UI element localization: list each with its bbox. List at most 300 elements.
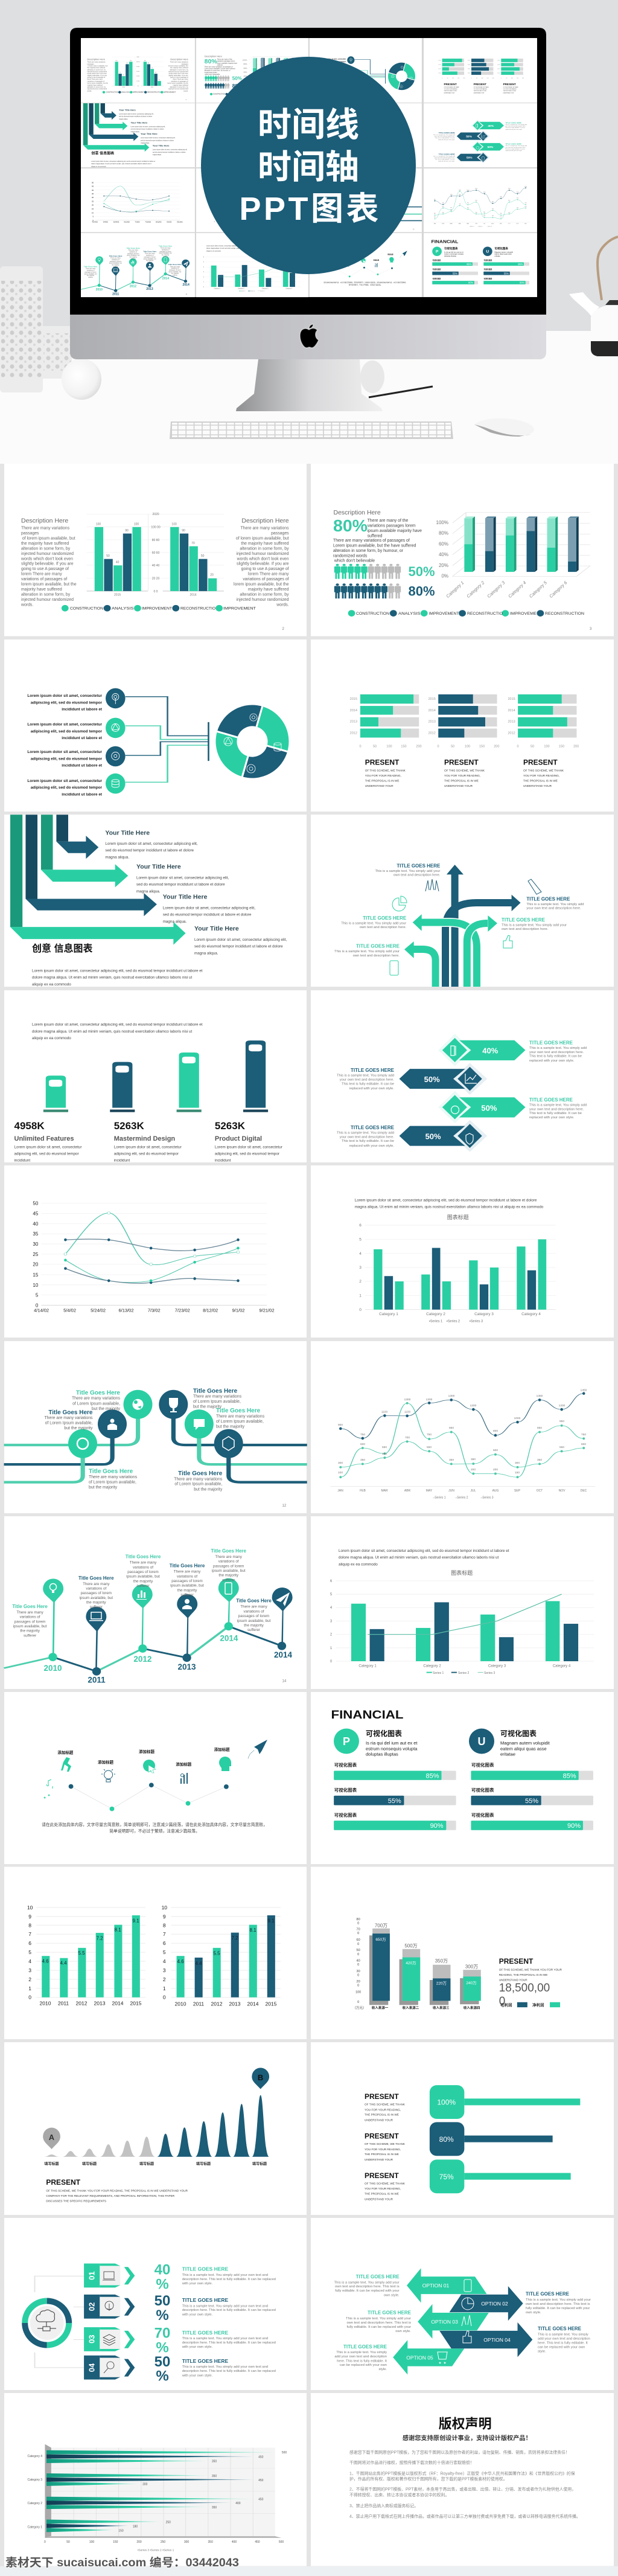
axis labels: 100 bbox=[544, 745, 550, 748]
legend: –Series 3 bbox=[480, 1496, 494, 1500]
milestone text: the majority bbox=[86, 1600, 106, 1605]
card titles: TITLE GOES HERE bbox=[182, 2297, 229, 2303]
hex icons bbox=[451, 1046, 477, 1144]
milestone text: sufferer bbox=[180, 1593, 194, 1597]
callout text: style. bbox=[378, 2368, 387, 2371]
value and axis labels: 0 0 bbox=[154, 590, 158, 594]
column text: Magnam autem volupidit bbox=[500, 1740, 550, 1746]
y axis labels: 25 bbox=[33, 1252, 39, 1257]
y axis labels: 60% bbox=[439, 541, 448, 547]
connector lines bbox=[34, 2276, 84, 2368]
icon circles bbox=[106, 688, 126, 793]
arrow titles: Your Title Here bbox=[136, 863, 181, 871]
slide background bbox=[311, 815, 614, 987]
grid bbox=[365, 1225, 556, 1310]
callout text: replaced with your own style. bbox=[349, 1087, 394, 1091]
line chart bbox=[64, 1211, 240, 1284]
axis labels: 2014 bbox=[350, 709, 357, 713]
milestone text: ipsum available, but bbox=[212, 1569, 246, 1573]
value labels: 9.1 bbox=[267, 1918, 275, 1924]
value and axis labels: 40 bbox=[116, 561, 119, 565]
y axis labels: 30 bbox=[33, 1242, 39, 1247]
callout text: This is a sample text. You simply add bbox=[529, 1046, 587, 1050]
axis labels: 2013 bbox=[350, 720, 357, 724]
slide background bbox=[311, 1341, 614, 1513]
card titles: TITLE GOES HERE bbox=[182, 2330, 229, 2336]
text block right: words. bbox=[276, 603, 289, 607]
station circles bbox=[68, 1390, 243, 1458]
x axis labels: 6/13/02 bbox=[118, 1308, 134, 1313]
milestone text: variations of bbox=[177, 1574, 197, 1578]
total figure: 18,500,00 bbox=[499, 1982, 550, 1994]
pen bbox=[369, 386, 433, 397]
milestone text: variations of bbox=[86, 1587, 107, 1591]
milestone text: ipsum available, but bbox=[79, 1596, 113, 1600]
milestone text: passages of lorem bbox=[238, 1614, 269, 1618]
card text: This is a sample text. You simply add your own text and bbox=[182, 2304, 268, 2308]
axis labels: 0 bbox=[437, 745, 439, 748]
value labels: 350万 bbox=[435, 1958, 448, 1964]
axis labels: 100 bbox=[465, 745, 470, 748]
text block left: of lorem ipsum available, but bbox=[21, 536, 75, 540]
slide background bbox=[4, 1516, 307, 1689]
value labels: 5.5 bbox=[78, 1950, 85, 1956]
value labels: 4.6 bbox=[177, 1959, 184, 1964]
arrow text: Lorem ipsum dolor sit amet, consectetur adipiscing elit, bbox=[136, 876, 229, 880]
axis labels bbox=[27, 1905, 277, 2007]
slide 2: percentage stats and 3D column chart bbox=[311, 464, 614, 636]
callout text: This is a sample text. You simply add your bbox=[341, 921, 406, 925]
slide background bbox=[311, 1692, 614, 1864]
callout text: can be replaced with your own bbox=[340, 2363, 387, 2367]
value labels: 4.4 bbox=[195, 1961, 202, 1966]
value and axis labels: 60 60 bbox=[152, 551, 159, 555]
text block: There are many of the bbox=[368, 519, 409, 523]
y axis labels: 0 bbox=[357, 1932, 359, 1935]
bent arrows bbox=[10, 815, 186, 945]
big percentages: 50 bbox=[154, 2354, 170, 2370]
spike labels bbox=[44, 2162, 267, 2167]
stat text bbox=[14, 1145, 282, 1163]
axis labels: 6 bbox=[359, 1223, 362, 1228]
category labels bbox=[445, 580, 569, 599]
progress bars bbox=[334, 1770, 593, 1830]
present text: THE PROPOSAL IS IN WE bbox=[365, 2153, 399, 2156]
text block right: variations of passages of bbox=[243, 577, 289, 582]
slide 13: pin timeline bbox=[4, 1516, 307, 1689]
axis labels: Category 3 bbox=[474, 1312, 494, 1316]
axis labels: 2015 bbox=[266, 2001, 277, 2007]
station text: There are many variations bbox=[89, 1475, 138, 1479]
y axis labels: 80 bbox=[357, 1918, 360, 1921]
bar charts bbox=[360, 694, 576, 737]
axis labels: 0 bbox=[517, 745, 519, 748]
text blocks: Lorem ipsum dolor sit amet, consectetur bbox=[27, 723, 102, 727]
screen thumbnail 4 bbox=[424, 38, 537, 103]
value labels: 250 bbox=[166, 2520, 171, 2524]
present text: THE PROPOSAL IS IN WE bbox=[365, 779, 400, 782]
milestone text: ipsum available, but bbox=[126, 1575, 160, 1579]
vase: tall perforated bbox=[0, 266, 43, 392]
spike labels: 填写标题 bbox=[252, 2162, 267, 2167]
month labels: JAN bbox=[337, 1489, 343, 1493]
value labels bbox=[42, 1918, 275, 1966]
x axis labels: 300 bbox=[184, 2540, 189, 2544]
callout titles: TITLE GOES HERE bbox=[356, 944, 400, 949]
text block right: alteration in some form, by bbox=[240, 593, 289, 597]
percent labels: 50% bbox=[424, 1075, 440, 1084]
description: 请在此处添加具体内容，文字尽量言简意赅，简单说明即可，注意减少篇段落，请在此处添加具体内容，文字尽量言简意赅， bbox=[42, 1822, 267, 1827]
screen thumbnail 13 bbox=[81, 233, 195, 297]
milestone text: passages of lorem bbox=[81, 1591, 112, 1595]
arrow text: sed do eiusmod tempor incididunt ut labore et dolore bbox=[105, 848, 194, 853]
milestone text: There are many bbox=[16, 1610, 44, 1615]
present text: READING, THE PROPOSAL IS IN WE bbox=[499, 1973, 547, 1976]
value and axis labels: 90 bbox=[125, 529, 129, 533]
slide background bbox=[311, 639, 614, 812]
stat numbers: 5263K bbox=[215, 1120, 246, 1132]
axis labels: Category 4 bbox=[521, 1312, 541, 1316]
callout text: here. This text is fully editable. It bbox=[337, 2359, 387, 2363]
callout text: This is a sample text. You simply add bbox=[526, 903, 584, 906]
callout text: add your own text and description bbox=[334, 2355, 387, 2359]
present headings: PRESENT bbox=[365, 2132, 399, 2140]
present text: OF THIS SCHEME, WE THANK bbox=[365, 2103, 406, 2106]
present text: OF THIS SCHEME, WE THANK bbox=[523, 769, 564, 772]
axis labels: 10 bbox=[27, 1905, 33, 1911]
pin icons bbox=[49, 1583, 290, 1621]
card text: This is a sample text. You simply add your own text and bbox=[182, 2273, 268, 2277]
icon: thumb bbox=[503, 935, 512, 948]
category labels: Category 2 bbox=[28, 2502, 42, 2505]
milestone text: passages of lorem bbox=[14, 1620, 45, 1624]
value labels: 1100 bbox=[404, 1411, 410, 1414]
arrow text: Lorem ipsum dolor sit amet, consectetur adipiscing elit, bbox=[163, 906, 255, 910]
stat text: Lorem ipsum dolor sit amet, consectetur bbox=[14, 1145, 82, 1150]
text block right: going to use A passage of bbox=[241, 567, 289, 571]
slide 24: copyright notice bbox=[311, 2393, 614, 2566]
slide 3: connector diagram with segmented ring bbox=[4, 639, 307, 812]
year labels bbox=[43, 1633, 293, 1685]
year labels: 2013 bbox=[177, 1662, 196, 1671]
text block left: variations of passages of bbox=[21, 577, 67, 582]
category labels: Category 3 bbox=[486, 580, 506, 599]
axis labels: 200 bbox=[494, 745, 499, 748]
card numbers: 01 bbox=[87, 2271, 96, 2280]
axis labels: 200 bbox=[416, 745, 422, 748]
icon: tag bbox=[528, 879, 541, 894]
connector lines bbox=[126, 697, 209, 782]
legend: –Series 2 bbox=[455, 1496, 468, 1500]
arrow text: Lorem ipsum dolor sit amet, consectetur adipiscing elit, bbox=[105, 842, 198, 846]
text block left: alteration in some form, by bbox=[21, 593, 71, 597]
milestone titles: Title Goes Here bbox=[170, 1563, 205, 1569]
category labels bbox=[372, 2005, 480, 2010]
screen thumbnail 12 bbox=[424, 168, 537, 232]
stat text: incididunt bbox=[14, 1159, 30, 1163]
present headings: PRESENT bbox=[523, 758, 558, 767]
option labels: OPTION 01 bbox=[422, 2283, 449, 2289]
chart title: 图表标题 bbox=[451, 1569, 473, 1576]
callout text bbox=[337, 1046, 587, 1148]
text blocks: Lorem ipsum dolor sit amet, consectetur bbox=[27, 750, 102, 754]
present text: OF THIS SCHEME, WE THANK bbox=[365, 2142, 406, 2145]
axis labels bbox=[350, 697, 579, 748]
axis labels: Category 2 bbox=[423, 1664, 441, 1668]
progress bar labels: 可视化图表 bbox=[334, 1812, 357, 1818]
text block left: slightly believable. If you are bbox=[21, 562, 74, 566]
text block left: alteration in some form, by bbox=[21, 546, 71, 551]
slide 14: combo bar and line chart bbox=[311, 1516, 614, 1689]
month labels: JUL bbox=[471, 1489, 476, 1493]
legend markers bbox=[62, 605, 223, 612]
page number: 14 bbox=[282, 1680, 287, 1684]
watermark: 素材天下 sucaisucai.com 编号：03442043 bbox=[5, 2555, 239, 2569]
stat names: Unlimited Features bbox=[14, 1135, 74, 1142]
value labels: 550 bbox=[382, 1446, 387, 1449]
month labels: JUN bbox=[448, 1489, 454, 1493]
legend labels: CONSTRUCTION bbox=[356, 612, 389, 616]
x axis labels: 150 bbox=[113, 2540, 118, 2544]
value labels: 300 bbox=[515, 1461, 520, 1465]
axis labels: 2011 bbox=[193, 2001, 204, 2007]
slide background bbox=[4, 2393, 307, 2566]
pillar chart bbox=[43, 1040, 268, 1112]
slide 23: 3D spike bar chart bbox=[4, 2393, 307, 2566]
present text: YOU FOR YOUR READING, bbox=[365, 2187, 401, 2190]
slide 19: growth spikes from A to B bbox=[4, 2042, 307, 2215]
milestone text: sufferer bbox=[90, 1605, 103, 1609]
axis labels: 2012 bbox=[350, 731, 357, 735]
value labels: 900 bbox=[338, 1423, 343, 1427]
column charts bbox=[42, 1915, 275, 1998]
card numbers bbox=[87, 2271, 97, 2372]
slide background bbox=[311, 2393, 614, 2566]
3D chart floor and grid bbox=[453, 513, 590, 576]
slide background bbox=[311, 1867, 614, 2039]
text block left: majority have suffered bbox=[21, 588, 62, 592]
arrow text: magna aliqua. bbox=[163, 920, 187, 924]
present text: YOU FOR YOUR READING, bbox=[365, 2108, 401, 2111]
x axis labels: 7/3/02 bbox=[148, 1308, 161, 1313]
axis labels: 150 bbox=[559, 745, 564, 748]
value and axis labels: 80 80 bbox=[152, 539, 159, 542]
legend labels: RECONSTRUCTIO bbox=[467, 612, 503, 616]
screen thumbnail 9 bbox=[81, 168, 195, 232]
3D column chart bbox=[464, 516, 579, 572]
pictogram: 50% and 80% people bbox=[334, 564, 401, 598]
x axis labels bbox=[44, 2540, 284, 2544]
callout titles bbox=[351, 1040, 573, 1130]
year labels: 2014 bbox=[220, 1633, 238, 1642]
axis labels: 2010 bbox=[40, 2000, 51, 2006]
value labels: 950 bbox=[559, 1420, 564, 1423]
station text: but the majority bbox=[194, 1488, 223, 1491]
text block right: the majority have suffered bbox=[241, 542, 289, 546]
callout text: This is a sample text. You simply add your bbox=[502, 923, 567, 927]
screen background bbox=[81, 38, 537, 297]
y axis labels bbox=[352, 1918, 366, 2010]
slide 12: monthly three-series line chart bbox=[311, 1341, 614, 1513]
callout titles: TITLE GOES HERE bbox=[351, 1068, 395, 1073]
text block left: lorem ipsum available, but the bbox=[21, 583, 77, 587]
value and axis labels: 50 bbox=[201, 554, 205, 558]
present headings: PRESENT bbox=[365, 758, 400, 767]
slide background bbox=[311, 1516, 614, 1689]
slide background bbox=[4, 1692, 307, 1864]
slide 21: hub with four numbered cards bbox=[4, 2218, 307, 2390]
month labels: ABR bbox=[404, 1489, 411, 1493]
axis labels: 0 bbox=[359, 1308, 362, 1312]
slide 15: step path with icons bbox=[4, 1692, 307, 1864]
arrow text: sed do eiusmod tempor incididunt ut labore et dolore bbox=[194, 944, 283, 949]
x axis labels: 450 bbox=[255, 2540, 260, 2544]
category labels: Category 5 bbox=[528, 580, 549, 599]
stat text: Lorem ipsum dolor sit amet, consectetur bbox=[114, 1145, 182, 1150]
big percentages bbox=[154, 2262, 170, 2384]
month labels: NOV bbox=[559, 1489, 565, 1493]
text block: which don't believable bbox=[333, 559, 375, 563]
text block: alteration in some form, by humour, or bbox=[333, 549, 404, 553]
value labels: 360 bbox=[471, 1458, 476, 1461]
axis labels: Category 1 bbox=[379, 1312, 398, 1316]
legend labels: RECONSTRUCTIO bbox=[180, 607, 215, 611]
category labels bbox=[28, 2455, 42, 2529]
option labels: OPTION 05 bbox=[406, 2354, 433, 2360]
ring icons bbox=[224, 714, 281, 773]
body text: 千图网将对作品进行维权，按照传播下载次数的十倍进行索取赔偿！ bbox=[349, 2460, 474, 2465]
line chart bbox=[330, 1392, 595, 1487]
heading left: Description Here bbox=[21, 517, 68, 525]
callout text: replaced with your own style. bbox=[529, 1059, 575, 1063]
percent labels: 80% bbox=[439, 2135, 454, 2144]
value labels bbox=[375, 1923, 478, 1986]
screen thumbnail 16 bbox=[424, 233, 537, 297]
stat text: Lorem ipsum dolor sit amet, consectetur bbox=[215, 1145, 282, 1150]
value labels: 750 bbox=[581, 1433, 586, 1437]
callout text: your own text and description here. bbox=[340, 1078, 394, 1081]
callout titles: TITLE GOES HERE bbox=[351, 1125, 395, 1130]
axis labels: Category 1 bbox=[358, 1664, 377, 1668]
text blocks: incididunt ut labore et bbox=[62, 792, 103, 796]
value labels: 500 bbox=[493, 1449, 498, 1452]
pin letters bbox=[49, 2073, 263, 2142]
mouse bbox=[474, 418, 534, 437]
axis labels: 2 bbox=[28, 1976, 31, 1982]
legend labels: CONSTRUCTION bbox=[70, 607, 103, 611]
station text: of Lorem Ipsum available, bbox=[45, 1421, 93, 1426]
title bbox=[239, 106, 379, 227]
arrow text: Lorem ipsum dolor sit amet, consectetur adipiscing elit, bbox=[194, 938, 287, 942]
hub ring bbox=[25, 2301, 69, 2345]
card titles bbox=[182, 2266, 229, 2364]
present text: YOU FOR YOUR READING, bbox=[523, 774, 559, 777]
category labels: Category 3 bbox=[28, 2478, 42, 2482]
axis labels: 2014 bbox=[112, 2000, 124, 2006]
milestone titles: Title Goes Here bbox=[126, 1554, 161, 1560]
stat text: incididunt bbox=[215, 1159, 231, 1163]
slide 5: nested bent arrows bbox=[4, 815, 307, 987]
body text: 2、不得将千图网的PPT模板、PPT素材，本身用于再出售，或者出租、出借、转让、分销、发布或者作为礼物供他人使用， bbox=[349, 2487, 576, 2492]
axis labels: 2012 bbox=[76, 2000, 88, 2006]
value labels: 350 bbox=[537, 1458, 542, 1462]
card titles: TITLE GOES HERE bbox=[182, 2266, 229, 2272]
spike labels: 填写标题 bbox=[44, 2162, 59, 2167]
wall bbox=[0, 0, 618, 331]
paper ball bbox=[360, 360, 384, 393]
milestone text: variations of bbox=[218, 1560, 239, 1564]
big percentages: % bbox=[156, 2368, 169, 2384]
axis labels: 5 bbox=[330, 1593, 333, 1597]
pin letters: B bbox=[258, 2073, 263, 2082]
percent labels: 75% bbox=[439, 2173, 454, 2181]
callout text: own text and description here. bbox=[353, 954, 400, 958]
percent labels: 50% bbox=[425, 1132, 441, 1141]
y axis labels: 35 bbox=[33, 1231, 39, 1237]
axis labels: 7 bbox=[163, 1931, 166, 1937]
legend bbox=[433, 1496, 494, 1500]
vase: short perforated bbox=[43, 326, 72, 379]
bar chart 2015 and 2014 bbox=[87, 527, 224, 591]
intro text: Lorem ipsum dolor sit amet, consectetur adipiscing elit, sed do eiusmod tempor incididunt ut labore et bbox=[339, 1549, 509, 1553]
callout titles: TITLE GOES HERE bbox=[538, 2326, 582, 2331]
stat labels: 50% bbox=[408, 564, 435, 579]
slide background bbox=[4, 464, 307, 636]
axis labels: 3 bbox=[163, 1967, 166, 1973]
column text: Is ria qui del ium aut ex et bbox=[366, 1740, 418, 1746]
station titles: Title Goes Here bbox=[193, 1388, 238, 1394]
value and axis labels: 70 bbox=[191, 542, 195, 545]
callout text: fully editable. It can be replaced with your bbox=[347, 2325, 411, 2329]
column text: eatem aliqui quas asse bbox=[500, 1746, 547, 1751]
callout text: fully editable. It can be replaced with your bbox=[335, 2289, 400, 2293]
axis labels bbox=[330, 1580, 571, 1668]
text block: variations passages lorem bbox=[368, 524, 416, 528]
value labels: 150 bbox=[515, 1471, 520, 1475]
intro text: dolore magna aliqua. Ut enim ad minim veniam, quis nostrud exercitation ullamco laboris nisi ut bbox=[32, 1030, 193, 1034]
screen thumbnail 10 bbox=[196, 168, 308, 232]
milestone text bbox=[13, 1555, 271, 1638]
value labels: 750 bbox=[427, 1433, 432, 1437]
present text: YOU FOR YOUR READING, bbox=[365, 2148, 401, 2151]
present text bbox=[365, 769, 564, 787]
milestone text: There are many bbox=[240, 1605, 268, 1609]
value labels: 350 bbox=[212, 2506, 217, 2510]
intro text: magna aliqua. Ut enim ad minim veniam, quis nostrud exercitation ullamco laboris nisi ut aliquip ex ea commodo bbox=[355, 1205, 544, 1209]
y axis labels: 5 bbox=[36, 1293, 39, 1298]
axis labels: 2015 bbox=[428, 697, 436, 701]
slide background bbox=[4, 1867, 307, 2039]
y axis labels bbox=[33, 1201, 39, 1308]
callout text: This is a sample text. You simply add bbox=[529, 1104, 587, 1107]
bottom strip bbox=[0, 2566, 618, 2576]
text block left: going to use A passage of bbox=[21, 567, 69, 571]
axis labels: 2013 bbox=[508, 720, 515, 724]
value and axis labels: 20 20 bbox=[152, 577, 159, 581]
present headings: PRESENT bbox=[365, 2092, 399, 2101]
icon: paper plane bbox=[248, 1740, 267, 1759]
y axis labels: 0 bbox=[357, 1921, 359, 1925]
body text: 1、千图网站出售的PPT模板是以版权形式（RF：Royalty-free）正版受《中华人民共和国著作法》和《世界版权公约》的保 bbox=[349, 2471, 575, 2476]
milestone text: variations of bbox=[20, 1615, 40, 1620]
slide 4: three horizontal bar charts bbox=[311, 639, 614, 812]
station titles: Title Goes Here bbox=[48, 1409, 93, 1416]
value labels: 240万 bbox=[466, 1981, 477, 1985]
card numbers: 02 bbox=[87, 2302, 97, 2311]
value labels: 600 bbox=[581, 1443, 586, 1446]
axis labels: 2012 bbox=[428, 731, 436, 735]
legend: ▪Series 2 bbox=[447, 1320, 460, 1324]
